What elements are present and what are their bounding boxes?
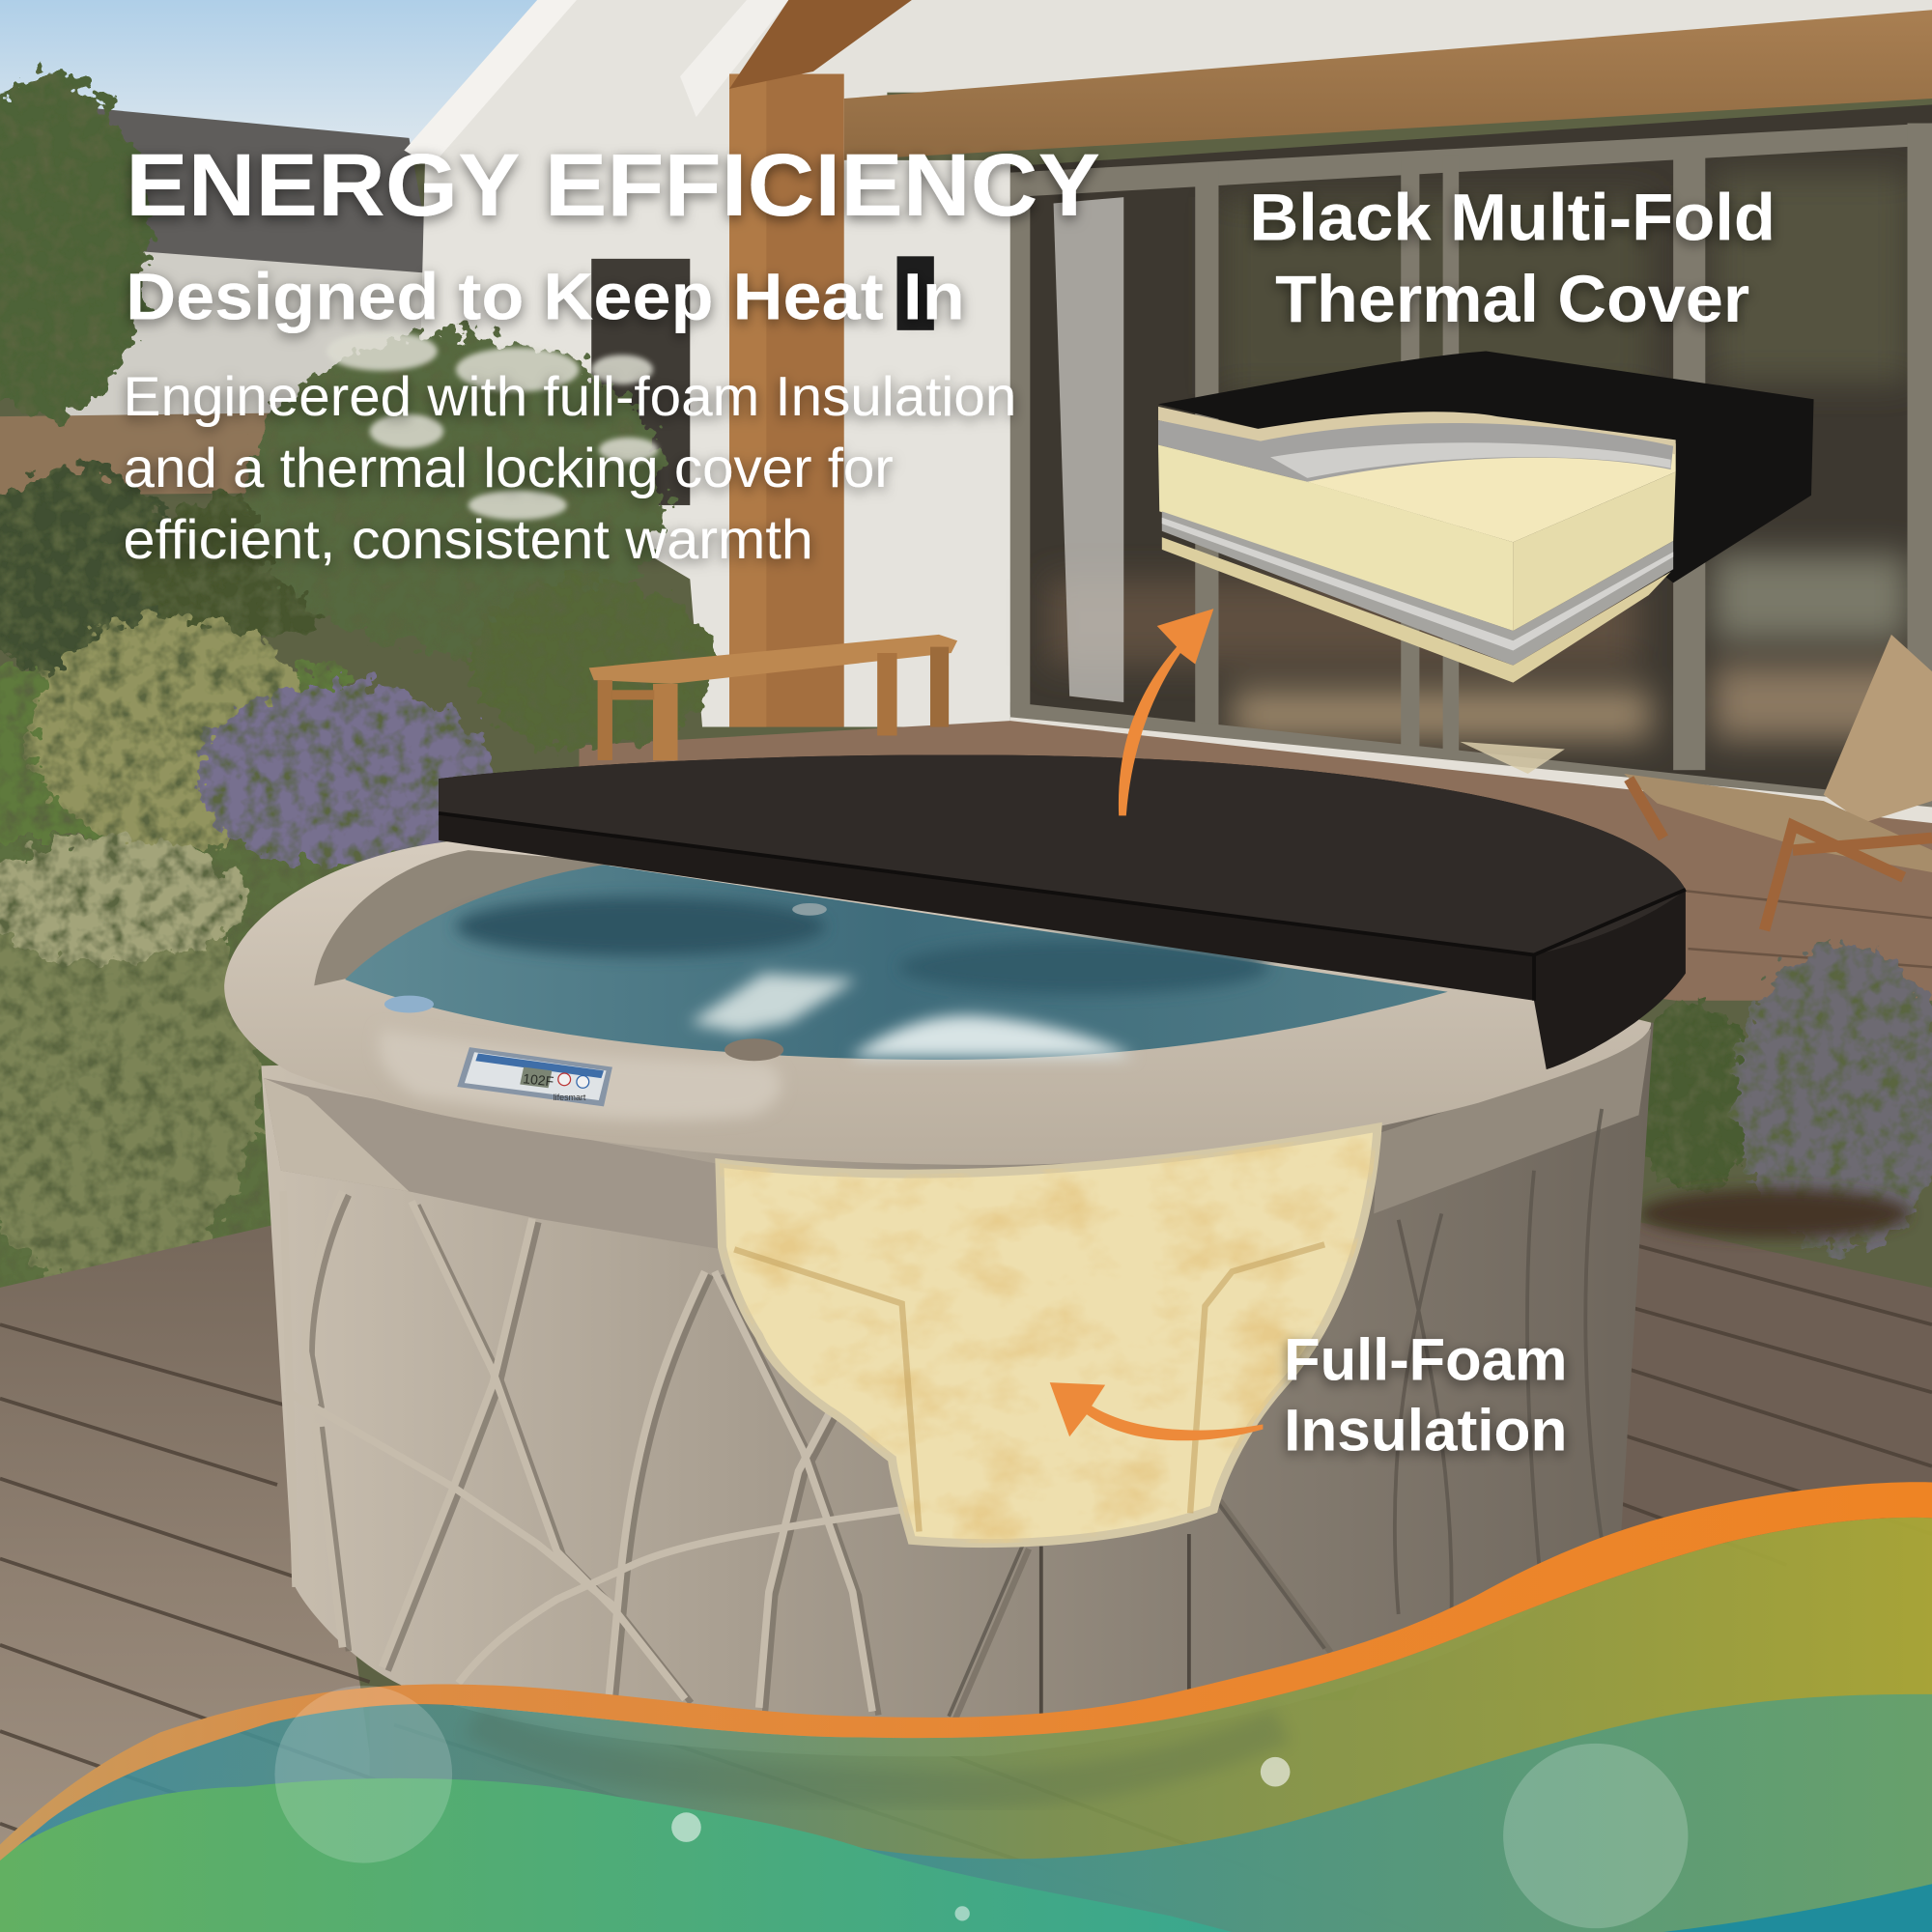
- mulch: [1638, 1189, 1910, 1238]
- corner blue wave: [1663, 1884, 1932, 1932]
- control panel: [457, 1047, 612, 1106]
- right lower wave: [863, 1694, 1932, 1932]
- grey lower layers: [1162, 511, 1673, 666]
- wave bubbles: [274, 1686, 1688, 1928]
- rim: [224, 840, 1651, 1165]
- rim inner wall: [314, 850, 616, 985]
- lounge chair: [1624, 635, 1932, 930]
- label: foam: Full-Foam: [1284, 1327, 1567, 1393]
- lower reflection sliver: [1460, 742, 1565, 774]
- neighbour house wall: [62, 234, 456, 443]
- left garden plants: [0, 74, 715, 1306]
- right shrubs: [1627, 943, 1932, 1251]
- house window: [591, 259, 690, 505]
- distant roof: [55, 104, 434, 273]
- patio window wall: [1010, 104, 1932, 819]
- water: [345, 865, 1448, 1060]
- body panel seam: [1041, 1534, 1189, 1725]
- orange wave band: [0, 1482, 1932, 1861]
- upper deck: [579, 721, 1932, 1001]
- window reflections: [1047, 173, 1922, 739]
- sky: [0, 0, 567, 160]
- thermal cover: [439, 754, 1686, 1069]
- description text: efficient, consistent warmth: [124, 509, 813, 571]
- wall lamp: [897, 256, 934, 330]
- left green wave: [0, 1778, 1233, 1932]
- hot tub: [224, 754, 1686, 1756]
- jet fittings: [384, 996, 434, 1012]
- window frames: [1010, 124, 1932, 823]
- grey upper layers: [1158, 420, 1673, 482]
- control panel: lifesmart: [554, 1093, 586, 1102]
- white house wall: [419, 0, 1010, 727]
- lower left deck: [0, 1220, 394, 1932]
- black cover shell: [1158, 352, 1814, 582]
- control panel: 102F: [523, 1070, 554, 1089]
- label: cover: Thermal Cover: [1275, 262, 1749, 336]
- upper siding: [850, 0, 1932, 93]
- rim control ledge highlight: [379, 1029, 781, 1120]
- curtain: [1054, 197, 1123, 702]
- description text: Engineered with full-foam Insulation: [124, 366, 1016, 428]
- tan bottom layer: [1162, 537, 1671, 683]
- water shading and foam: [456, 897, 1269, 1057]
- right upper band: [1374, 1029, 1651, 1213]
- moulded line pattern: [283, 1191, 904, 1712]
- foam core side: [1513, 472, 1676, 631]
- right side grooves: [949, 1109, 1602, 1717]
- upper deck planks: [1651, 887, 1932, 967]
- arrow: label to foam: [1050, 1382, 1263, 1440]
- bottom decorative wave: [0, 1482, 1932, 1932]
- foam insulation cutaway: [720, 1127, 1378, 1544]
- deck planks: [0, 1244, 1932, 1932]
- wood post: [729, 74, 844, 727]
- gable trim: [404, 0, 577, 166]
- title: ENERGY EFFICIENCY: [126, 136, 1100, 235]
- bench: [589, 635, 957, 760]
- label: cover: [1249, 181, 1776, 336]
- tub body: [261, 1023, 1654, 1756]
- description text: [124, 366, 1016, 571]
- lower right deck: [1233, 1213, 1932, 1932]
- moulded line pattern shadows: [312, 1195, 1331, 1720]
- foam core top: [1269, 443, 1676, 542]
- label: foam: [1284, 1327, 1567, 1463]
- arrow: cover to cross-section: [1119, 609, 1213, 815]
- fence: [0, 412, 296, 496]
- wood beam: [844, 10, 1932, 160]
- description text: and a thermal locking cover for: [124, 438, 894, 499]
- white sill: [1010, 717, 1932, 828]
- label: cover: Black Multi-Fold: [1249, 181, 1776, 255]
- foam mould ridges: [734, 1244, 1324, 1531]
- label: foam: Insulation: [1284, 1397, 1567, 1463]
- upper shell shadow band: [264, 1078, 722, 1249]
- subtitle: Designed to Keep Heat In: [126, 259, 965, 333]
- foam core front: [1158, 444, 1513, 631]
- tan top layer: [1158, 407, 1676, 455]
- foam mottling: [720, 1127, 1378, 1544]
- insulated cover cross-section: [1158, 352, 1814, 774]
- tub base shadow through wave: [474, 1719, 1282, 1789]
- base wave fill: [0, 1518, 1932, 1932]
- white flower clusters: [327, 331, 658, 520]
